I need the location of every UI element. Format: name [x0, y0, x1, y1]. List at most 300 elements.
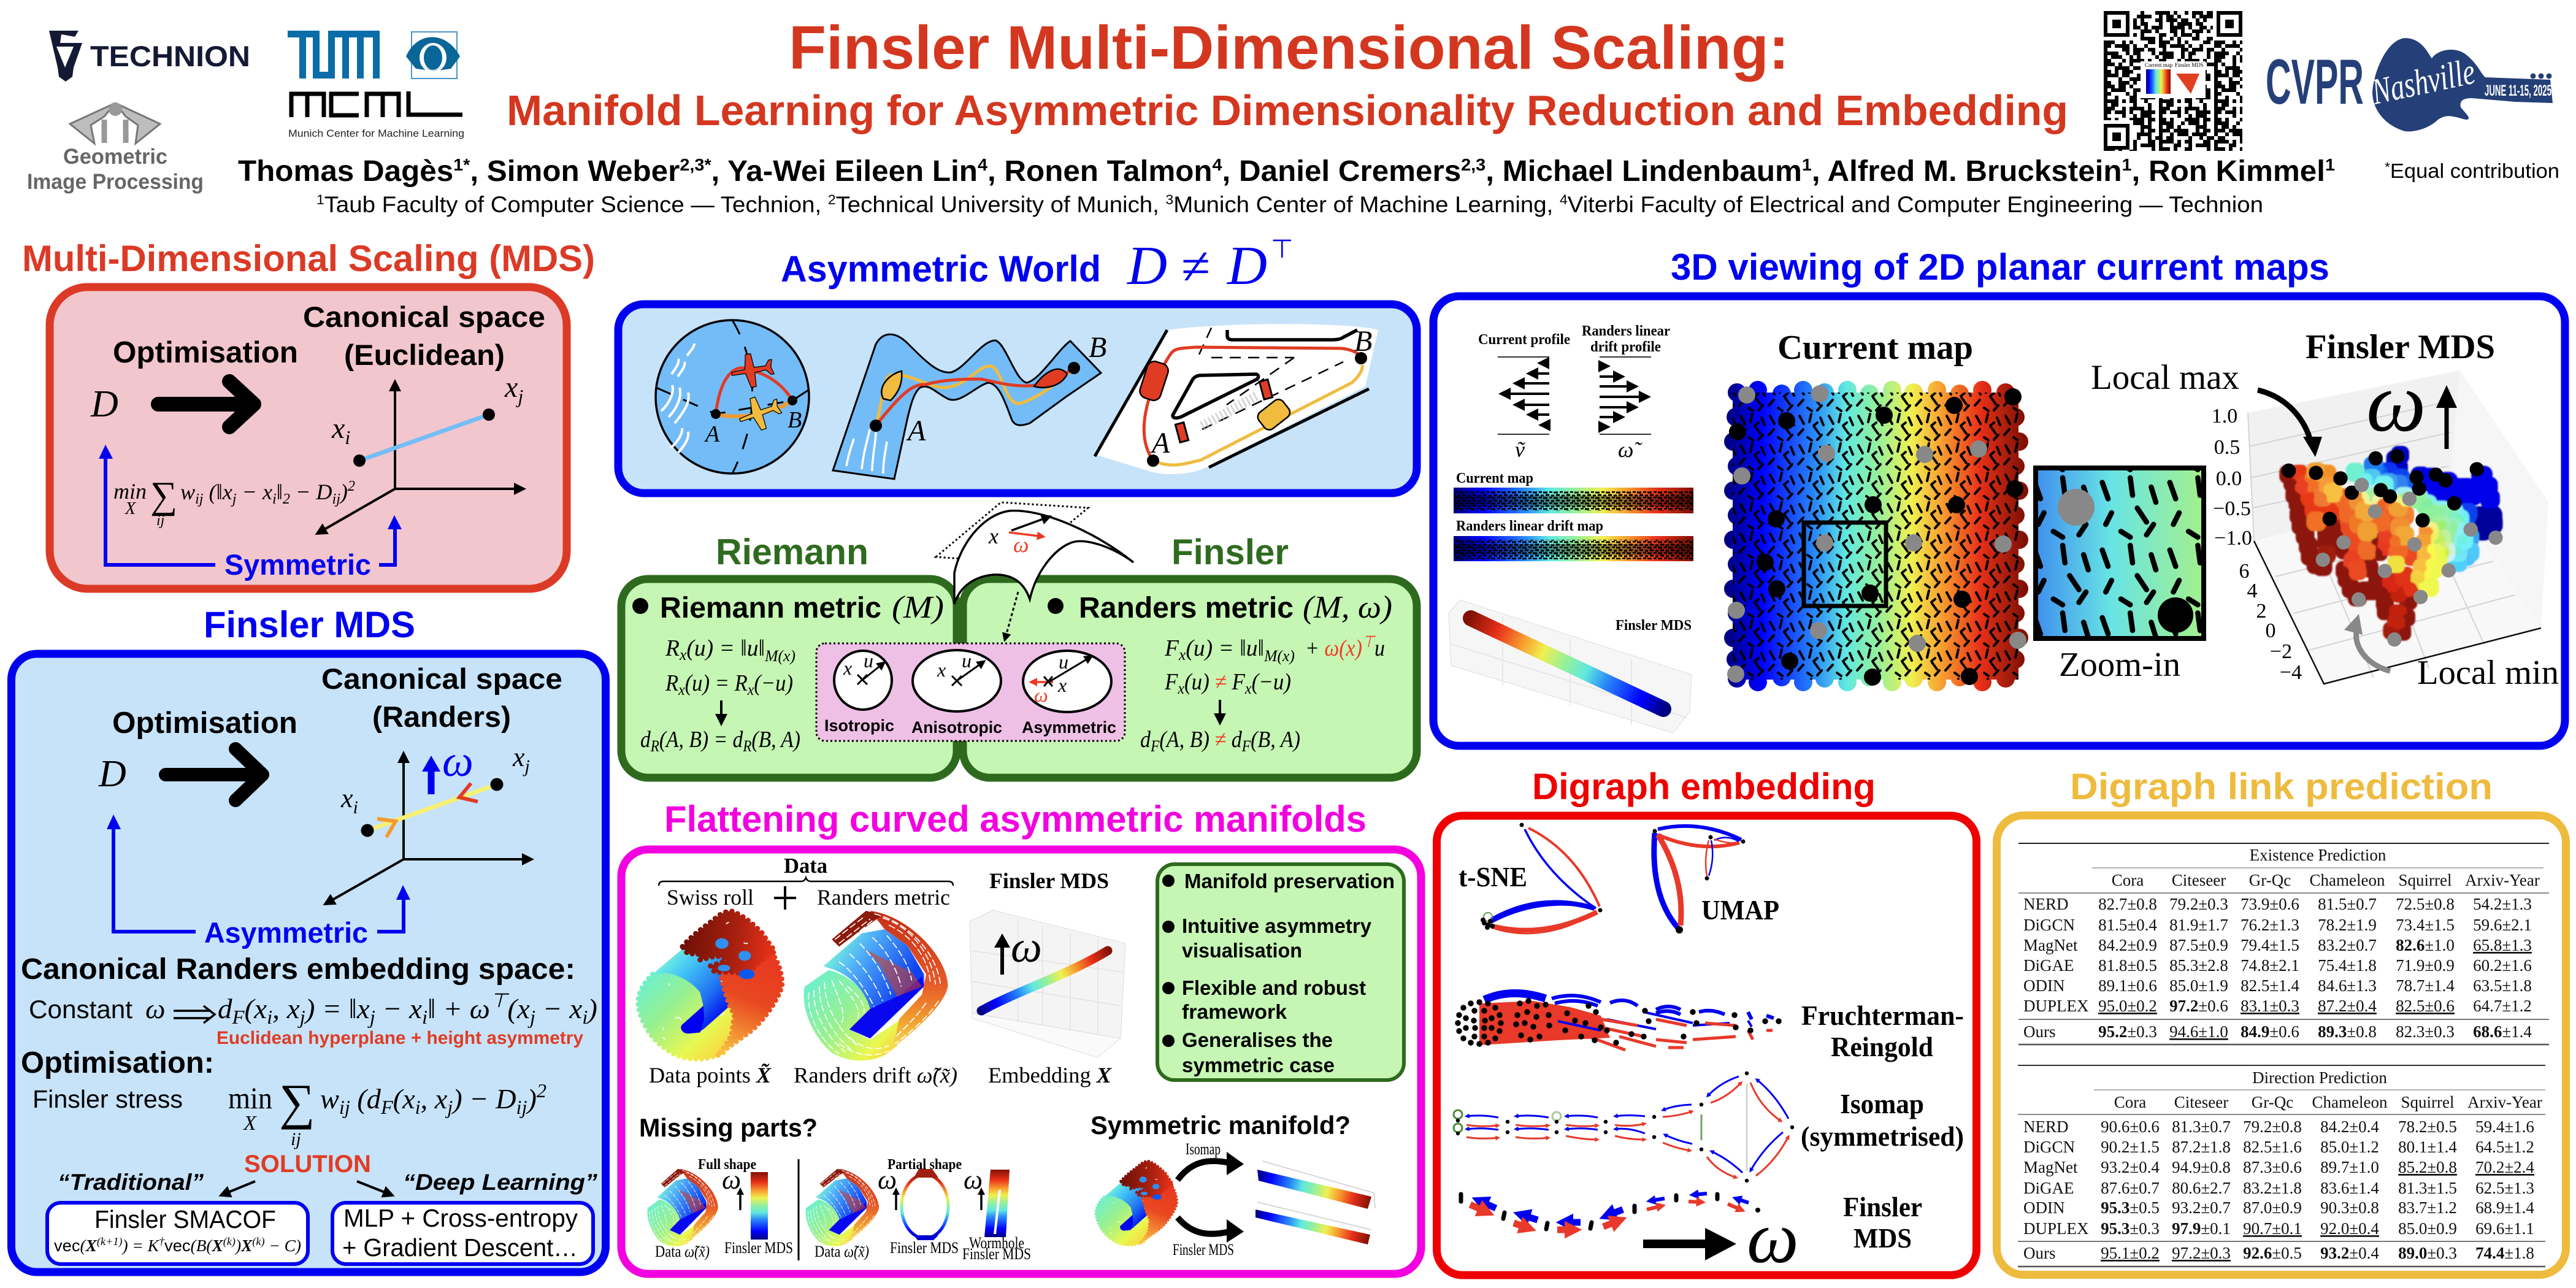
- box: Finsler SMACOF: (k+1): [97, 1235, 123, 1248]
- table: existence prediction: 81.5±0.4: [2098, 916, 2157, 934]
- table: direction prediction: 70.2±2.4: [2475, 1158, 2534, 1176]
- table: existence prediction: 79.2±0.3: [2169, 895, 2228, 913]
- heading: Asymmetric World: ⊤: [1271, 234, 1294, 263]
- icon: omega with arrow: [2366, 355, 2457, 449]
- table: direction prediction: 95.1±0.2: [2101, 1244, 2160, 1262]
- formulas: Riemann: (u) = ‖u‖: [686, 635, 765, 661]
- formula: Randers distance: ) = ‖x: [304, 993, 370, 1024]
- heading: Asymmetric World: D: [1226, 236, 1267, 296]
- formulas: Riemann: x: [679, 646, 687, 664]
- formula: Finsler stress: j: [445, 1096, 453, 1118]
- table: direction prediction: 97.9±0.1: [2172, 1219, 2231, 1238]
- heading: Digraph link prediction: Digraph link prediction: [2070, 766, 2493, 807]
- table: direction prediction: NERD: [2023, 1117, 2068, 1136]
- table: direction prediction: MagNet: [2023, 1158, 2078, 1176]
- caption: Randers drift: Randers drift ω̃(x̃): [794, 1063, 957, 1087]
- box: Finsler SMACOF: vec: [164, 1236, 191, 1255]
- table: existence prediction: 87.2±0.4: [2318, 997, 2377, 1015]
- label: Finsler MDS: Finsler: [1843, 1191, 1922, 1222]
- formula: Finsler stress: i: [415, 1096, 421, 1118]
- formulas: Randers: [1140, 633, 1385, 755]
- heading: Missing parts: Missing parts?: [639, 1113, 818, 1142]
- formulas: Randers: (A, B): [1159, 727, 1214, 753]
- graph: UMAP: [1654, 826, 1743, 933]
- table: existence prediction: 54.2±1.3: [2473, 895, 2532, 913]
- points with asymmetric line: i: [353, 797, 358, 818]
- formula: MDS stress: j: [231, 491, 237, 507]
- chart: Finsler MDS 3D surface: [2212, 355, 2548, 684]
- formulas: Randers: x: [1178, 646, 1186, 664]
- table: direction prediction: 90.7±0.1: [2243, 1219, 2302, 1238]
- equal contribution note: *: [2385, 159, 2390, 175]
- box: Finsler SMACOF: X: [240, 1236, 253, 1255]
- formulas: Randers: (u) = ‖u‖: [1186, 635, 1264, 661]
- group: partial shape: Finsler MDS: [890, 1239, 959, 1257]
- table: direction prediction: 64.5±1.2: [2475, 1138, 2534, 1156]
- chart: Finsler MDS 3D surface: 6: [2239, 560, 2250, 583]
- caption: zoom-in: Zoom-in: [2059, 646, 2180, 684]
- formula: MDS stress: (‖x: [204, 480, 232, 504]
- chart: Finsler MDS 3D surface: 2: [2256, 600, 2267, 623]
- formulas: Randers: F: [1165, 635, 1179, 661]
- illustration: tangent plane over manifold: [936, 502, 1133, 640]
- formula: Randers distance: i: [422, 1006, 427, 1028]
- group: full shape: [647, 1157, 793, 1260]
- authors: 4: [978, 155, 987, 174]
- formulas: Randers: x: [1244, 680, 1252, 697]
- formulas: Randers: ≠ F: [1215, 669, 1247, 695]
- logo: MCML: [288, 91, 464, 139]
- table: existence prediction: 73.9±0.6: [2241, 895, 2299, 913]
- table: existence prediction: 59.6±2.1: [2473, 916, 2532, 934]
- table: direction prediction: DiGCN: [2023, 1138, 2075, 1156]
- table: direction prediction: 87.3±0.6: [2243, 1158, 2302, 1176]
- formula: Finsler stress: , x: [421, 1083, 448, 1114]
- table: direction prediction: 59.4±1.6: [2475, 1117, 2534, 1136]
- group: partial shape: Wormhole: [969, 1234, 1024, 1252]
- chart: Randers drift strip: Randers linear drift map: [1456, 518, 1603, 534]
- ellipse: asymmetric: x: [1057, 674, 1067, 696]
- formulas: Randers: u: [1374, 635, 1385, 661]
- points xi and xj: i: [345, 426, 350, 448]
- table: existence prediction: Arxiv-Year: [2465, 871, 2540, 889]
- table: direction prediction: 83.2±1.8: [2243, 1179, 2302, 1197]
- box: Finsler SMACOF: vec(X: [54, 1236, 97, 1255]
- logo: Technion: [49, 31, 250, 82]
- illustration: river with boats: B: [1089, 331, 1106, 364]
- ellipse: isotropic: x: [843, 657, 852, 679]
- formula: MDS stress: 2: [348, 478, 355, 494]
- table: existence prediction: ODIN: [2023, 976, 2064, 995]
- table: existence prediction: 71.9±0.9: [2396, 956, 2455, 975]
- text: D: D: [90, 383, 118, 425]
- table: direction prediction: Squirrel: [2401, 1093, 2455, 1111]
- group: symmetric manifold: [1096, 1140, 1375, 1259]
- formula: MDS stress: X: [125, 499, 136, 518]
- table: direction prediction: 68.9±1.4: [2475, 1198, 2534, 1217]
- table: direction prediction: 95.3±0.5: [2101, 1198, 2160, 1217]
- chart: current map strip: [1454, 470, 1693, 513]
- logo: CVPR Nashville: [2266, 38, 2553, 131]
- text: Euclidean hyperplane note: Euclidean hyperplane + height asymmetry: [217, 1028, 583, 1048]
- subtitle: Manifold Learning for Asymmetric Dimensionality Reduction and Embedding: [507, 86, 2068, 134]
- box: Finsler SMACOF: ) = K: [121, 1236, 160, 1255]
- table: existence prediction: 85.3±2.8: [2169, 956, 2228, 975]
- formula: Randers distance: i: [267, 1006, 272, 1028]
- authors: 2,3: [1461, 155, 1485, 174]
- affiliations: Taub Faculty of Computer Science — Technion,: [324, 192, 828, 217]
- table: existence prediction: Cora: [2112, 871, 2144, 889]
- formula: MDS stress: min: [113, 479, 147, 504]
- table: direction prediction: 93.2±0.4: [2320, 1244, 2379, 1262]
- formula: Randers distance: (x: [245, 993, 267, 1024]
- logo: CVPR Nashville: CVPR: [2266, 47, 2364, 118]
- formula: MDS stress: ‖: [277, 480, 283, 504]
- QR code: [2104, 11, 2242, 150]
- table: existence prediction: 89.1±0.6: [2098, 976, 2157, 995]
- authors: 1: [2122, 155, 2132, 174]
- text: data header with brace: Data: [784, 854, 827, 878]
- table: direction prediction: 80.6±2.7: [2172, 1179, 2231, 1197]
- group: full shape: Full shape: [698, 1157, 756, 1173]
- text: canonical space Euclidean: Canonical space: [303, 301, 545, 333]
- table: existence prediction: Ours: [2023, 1022, 2056, 1041]
- heading: Asymmetric World: D: [1126, 236, 1167, 296]
- affiliations: Munich Center of Machine Learning,: [1173, 192, 1560, 217]
- table: direction prediction: 85.0±1.2: [2320, 1138, 2379, 1156]
- table: existence prediction: 82.7±0.8: [2098, 895, 2157, 913]
- authors: 2,3*: [680, 155, 711, 174]
- table: direction prediction: 84.2±0.4: [2320, 1117, 2379, 1136]
- formula: Finsler stress: F: [380, 1096, 393, 1118]
- table: existence prediction: Squirrel: [2398, 871, 2452, 889]
- table: existence prediction: 87.5±0.9: [2169, 936, 2228, 954]
- table: existence prediction: Citeseer: [2172, 871, 2226, 889]
- table: existence prediction: Existence Prediction: [2250, 846, 2386, 864]
- table: existence prediction: 82.6±1.0: [2396, 936, 2455, 954]
- box: MLP: MLP + Cross-entropy: [343, 1204, 578, 1232]
- heading: Riemann: Riemann: [716, 532, 868, 572]
- chart: Finsler MDS embedding: ω: [1011, 922, 1042, 972]
- heading: Finsler MDS: Finsler MDS: [2306, 328, 2495, 366]
- chart: zoom-in inset: [2036, 468, 2204, 638]
- text: local max: Local max: [2091, 358, 2239, 397]
- heading: current map: Current map: [1777, 329, 1973, 367]
- formulas: Randers: F: [1150, 737, 1160, 755]
- ellipse: anisotropic: Anisotropic: [911, 718, 1002, 737]
- table: existence prediction: DiGCN: [2023, 916, 2075, 934]
- ellipse: anisotropic: [911, 650, 1002, 737]
- group: partial shape: ω: [964, 1165, 983, 1195]
- text: canonical space Randers: [321, 662, 562, 733]
- table: direction prediction: DiGAE: [2023, 1179, 2074, 1197]
- heading: 3D viewing: 3D viewing of 2D planar current maps: [1671, 247, 2329, 288]
- box: benefits: [1157, 864, 1404, 1080]
- ellipse: isotropic: [824, 650, 894, 735]
- text: Randers metric heading: (M, ω): [1303, 590, 1392, 625]
- box: Finsler SMACOF: [47, 1203, 308, 1264]
- table: direction prediction: 90.2±1.5: [2101, 1138, 2160, 1156]
- table: direction prediction: Ours: [2023, 1244, 2056, 1262]
- formulas: Randers: F: [1241, 737, 1251, 755]
- box: Finsler SMACOF: (B(X: [191, 1236, 223, 1255]
- table: direction prediction: DUPLEX: [2023, 1219, 2089, 1238]
- graph: t-SNE: [1483, 825, 1600, 933]
- group: partial shape: [806, 1157, 1031, 1263]
- formula: Finsler stress: (x: [393, 1083, 415, 1114]
- affiliations: 4: [1560, 192, 1568, 207]
- table: existence prediction: 60.2±1.6: [2473, 956, 2532, 975]
- group: full shape: ω: [722, 1165, 741, 1195]
- formula: Randers distance: i: [582, 1006, 588, 1028]
- affiliations: Viterbi Faculty of Electrical and Computer Engineering — Technion: [1568, 192, 2263, 217]
- illustration: road with cars: A: [1150, 427, 1170, 459]
- table: direction prediction: 81.3±1.5: [2398, 1179, 2457, 1197]
- formula: Finsler stress: ∑: [279, 1074, 315, 1130]
- table: existence prediction: 95.0±0.2: [2098, 997, 2157, 1015]
- table: direction prediction: 69.6±1.1: [2475, 1219, 2534, 1238]
- table: existence prediction: 83.1±0.3: [2241, 997, 2299, 1015]
- chart: swiss roll points: [638, 911, 782, 1059]
- formulas: Randers: ≠ d: [1214, 727, 1244, 753]
- formula: Finsler stress: ij: [291, 1129, 301, 1149]
- illustration: globe with planes: [656, 320, 809, 473]
- table: existence prediction: 85.0±1.9: [2169, 976, 2228, 995]
- arrow: symmetric: [99, 445, 402, 565]
- table: direction prediction: 62.5±1.3: [2475, 1179, 2534, 1197]
- ellipse: asymmetric: [1022, 651, 1116, 737]
- chart: current map: [1727, 385, 2026, 686]
- chart: small Finsler MDS: Finsler MDS: [1616, 618, 1692, 634]
- points with asymmetric line: x: [341, 783, 353, 813]
- authors: 1*: [453, 155, 470, 174]
- box: benefits: framework: [1182, 1000, 1287, 1023]
- icon: omega with arrow: ω: [2366, 355, 2426, 449]
- box: Finsler SMACOF: − C): [265, 1236, 301, 1255]
- heading: Finsler MDS: Finsler MDS: [204, 604, 415, 645]
- points with asymmetric line: [340, 742, 530, 837]
- table: direction prediction: Chameleon: [2312, 1093, 2388, 1111]
- text: canonical space Randers: Canonical space: [321, 662, 562, 695]
- table: direction prediction: 87.6±0.7: [2101, 1179, 2160, 1197]
- divider: [797, 1159, 800, 1260]
- table: direction prediction: 97.2±0.3: [2172, 1244, 2231, 1262]
- group: partial shape: Finsler MDS: [962, 1245, 1031, 1263]
- table: existence prediction: DiGAE: [2023, 956, 2074, 975]
- table: existence prediction: 82.5±1.4: [2241, 976, 2299, 995]
- chart: Finsler MDS 3D surface: 0: [2266, 619, 2275, 642]
- table: existence prediction: Chameleon: [2310, 871, 2385, 889]
- affiliations: 1: [316, 192, 324, 207]
- table: direction prediction: 93.2±0.4: [2101, 1158, 2160, 1176]
- table: existence prediction: 78.2±1.9: [2318, 916, 2377, 934]
- text: Finsler MDS: Finsler MDS: [989, 868, 1109, 893]
- box: Finsler SMACOF: †: [159, 1235, 165, 1248]
- points with asymmetric line: x: [513, 742, 525, 772]
- formulas: Randers: ⊤: [1362, 633, 1376, 651]
- label: Fruchterman-Reingold: [1801, 1000, 1964, 1062]
- formula: Randers distance: j: [297, 1006, 305, 1028]
- panel: Randers metric: [963, 579, 1417, 778]
- formula: Finsler stress: [228, 1074, 546, 1149]
- formula: Finsler stress: ij: [339, 1096, 350, 1118]
- heading: Asymmetric World: ≠: [1181, 237, 1209, 296]
- formulas: Randers: (u): [1184, 669, 1215, 695]
- chart: Randers drift strip: [1454, 518, 1693, 561]
- table: existence prediction: 94.6±1.0: [2169, 1022, 2228, 1041]
- table: direction prediction: 78.2±0.5: [2398, 1117, 2457, 1136]
- table: direction prediction: 94.9±0.8: [2172, 1158, 2231, 1176]
- formula: MDS stress: w: [180, 480, 195, 504]
- formula: Randers distance: , x: [272, 993, 300, 1024]
- chart: current map strip: Current map: [1456, 470, 1533, 486]
- formula: Finsler stress: min: [228, 1081, 272, 1115]
- table: direction prediction: 82.5±1.6: [2243, 1138, 2302, 1156]
- table: existence prediction: 82.5±0.6: [2396, 997, 2455, 1015]
- formula: MDS stress: ij: [332, 491, 340, 507]
- table: direction prediction: [2018, 1065, 2545, 1267]
- table: direction prediction: 89.7±1.0: [2320, 1158, 2379, 1176]
- points xi and xj: j: [515, 385, 523, 407]
- table: existence prediction: 76.2±1.3: [2241, 916, 2299, 934]
- formulas: Riemann: (−u): [754, 670, 793, 696]
- text: D: D: [98, 753, 126, 795]
- text: canonical space Euclidean: (Euclidean): [344, 339, 505, 371]
- formulas: Riemann: R: [650, 737, 659, 755]
- authors: , Simon Weber: [470, 155, 680, 188]
- heading: Asymmetric World: [781, 234, 1294, 296]
- text: data header with brace: Randers metric: [817, 885, 950, 910]
- formula: Randers distance: ‖ + ω: [427, 993, 490, 1024]
- illustration: tangent plane over manifold: ω: [1013, 532, 1029, 557]
- ellipse: asymmetric: Asymmetric: [1022, 718, 1116, 737]
- logo: Geometric Image Processing: [27, 102, 204, 194]
- text: traditional: “Traditional”: [58, 1170, 204, 1195]
- illustration: river with boats: [833, 331, 1106, 479]
- table: existence prediction: 81.5±0.7: [2318, 895, 2377, 913]
- arrow: optimisation: [158, 381, 254, 427]
- box: benefits: visualisation: [1182, 939, 1302, 962]
- formula: Finsler stress: (d: [350, 1083, 381, 1114]
- chart: current and drift profiles: ṽ: [1515, 437, 1525, 462]
- ellipse: asymmetric: ω: [1034, 684, 1048, 706]
- formulas: Randers: d: [1140, 727, 1152, 753]
- ellipse: anisotropic: u: [962, 650, 972, 672]
- panel: Asymmetric World: [618, 304, 1417, 493]
- heading: Digraph embedding: Digraph embedding: [1532, 766, 1876, 807]
- formula: Finsler stress: X: [242, 1112, 257, 1135]
- illustration: road with cars: [1095, 324, 1378, 474]
- logo: Geometric Image Processing: Image Processing: [27, 170, 204, 194]
- box: benefits: Intuitive asymmetry: [1182, 914, 1372, 937]
- formula: Finsler stress: w: [320, 1083, 339, 1114]
- formula: Randers distance: ): [586, 993, 597, 1024]
- formulas: Riemann: [640, 635, 800, 755]
- table: direction prediction: Gr-Qc: [2252, 1093, 2293, 1111]
- formulas: Randers: + ω(x): [1305, 635, 1367, 661]
- text: asymmetric: Asymmetric: [204, 916, 368, 949]
- heading: Asymmetric World: Asymmetric World: [781, 248, 1101, 289]
- table: direction prediction: 89.0±0.3: [2398, 1244, 2457, 1262]
- illustration: globe with planes: A: [703, 421, 720, 447]
- table: direction prediction: 80.1±1.4: [2398, 1138, 2457, 1156]
- table: existence prediction: 81.9±1.7: [2169, 916, 2228, 934]
- label: Isomap symmetrised: (symmetrised): [1801, 1121, 1964, 1152]
- caption: data points: Data points X̃: [649, 1063, 772, 1087]
- text: Riemann metric heading: (M): [892, 590, 944, 625]
- table: direction prediction: 87.2±1.8: [2172, 1138, 2231, 1156]
- logo: TUM: [288, 31, 380, 79]
- omega up arrow: ω: [442, 737, 473, 786]
- authors: , Daniel Cremers: [1222, 155, 1461, 188]
- logo: MCML: Munich Center for Machine Learning: [288, 128, 464, 139]
- chart: current and drift profiles: ω̃: [1618, 437, 1643, 462]
- axes: [317, 381, 524, 534]
- box: benefits: Manifold preservation: [1184, 870, 1395, 892]
- text: Finsler stress: Finsler stress: [33, 1085, 183, 1113]
- authors: 1: [1802, 155, 1812, 174]
- table: existence prediction: 75.4±1.8: [2318, 956, 2377, 975]
- table: direction prediction: 85.2±0.8: [2398, 1158, 2457, 1176]
- formula: MDS stress: − D: [290, 480, 332, 504]
- label: Fruchterman-Reingold: Fruchterman-: [1801, 1000, 1964, 1031]
- text: Riemann metric heading: Riemann metric: [660, 592, 881, 624]
- formula: MDS stress: i: [272, 491, 277, 507]
- table: existence prediction: 89.3±0.8: [2318, 1022, 2377, 1041]
- label: Finsler MDS: [1843, 1191, 1922, 1254]
- text: Randers metric heading: Randers metric: [1079, 592, 1294, 624]
- formula: Randers distance: − x: [375, 993, 423, 1024]
- formula: MDS stress: ): [339, 480, 348, 504]
- formula: MDS stress: [113, 475, 355, 529]
- table: existence prediction: 97.2±0.6: [2169, 997, 2228, 1015]
- label: Fruchterman-Reingold: Reingold: [1831, 1031, 1933, 1062]
- group: symmetric manifold: Isomap: [1186, 1140, 1221, 1158]
- arrows from solution: [221, 1181, 393, 1195]
- authors: 4: [1213, 155, 1222, 174]
- logo: eye: [406, 32, 460, 79]
- table: direction prediction: 83.6±1.4: [2320, 1179, 2379, 1197]
- chart: Finsler MDS 3D surface: 0.0: [2216, 467, 2242, 490]
- text: solution: SOLUTION: [244, 1151, 371, 1178]
- heading: Symmetric manifold: Symmetric manifold?: [1091, 1111, 1351, 1140]
- table: existence prediction: 84.9±0.6: [2241, 1022, 2299, 1041]
- authors: , Alfred M. Bruckstein: [1812, 155, 2122, 188]
- arrow: asymmetric: [107, 815, 410, 932]
- chart: Finsler MDS 3D surface: 1.0: [2212, 405, 2237, 427]
- chart: Randers drift: [803, 911, 948, 1060]
- table: existence prediction: NERD: [2023, 895, 2068, 913]
- table: existence prediction: 82.3±0.3: [2396, 1022, 2455, 1041]
- logo: Technion: TECHNION: [90, 40, 250, 72]
- chart: current and drift profiles: Current profile: [1478, 332, 1570, 348]
- text: Riemann metric heading: [632, 590, 944, 625]
- graph: Isomap: [1454, 1073, 1792, 1181]
- table: existence prediction: 81.8±0.5: [2098, 956, 2157, 975]
- text: data header with brace: Swiss roll: [667, 885, 754, 910]
- panel: Digraph embedding: [1436, 816, 1976, 1278]
- formulas: Randers: M(x): [1263, 647, 1295, 665]
- QR code: Current map: [2145, 62, 2173, 68]
- formulas: Randers: (B, A): [1251, 727, 1300, 753]
- text: optimisation: Optimisation: [113, 336, 298, 369]
- equal contribution note: Equal contribution: [2390, 159, 2559, 182]
- authors: , Ya-Wei Eileen Lin: [711, 155, 978, 188]
- table: existence prediction: 73.4±1.5: [2396, 916, 2455, 934]
- formula: MDS stress: − x: [236, 480, 272, 504]
- table: direction prediction: 93.2±0.7: [2172, 1198, 2231, 1217]
- box: metric tangent ellipses: [816, 643, 1125, 741]
